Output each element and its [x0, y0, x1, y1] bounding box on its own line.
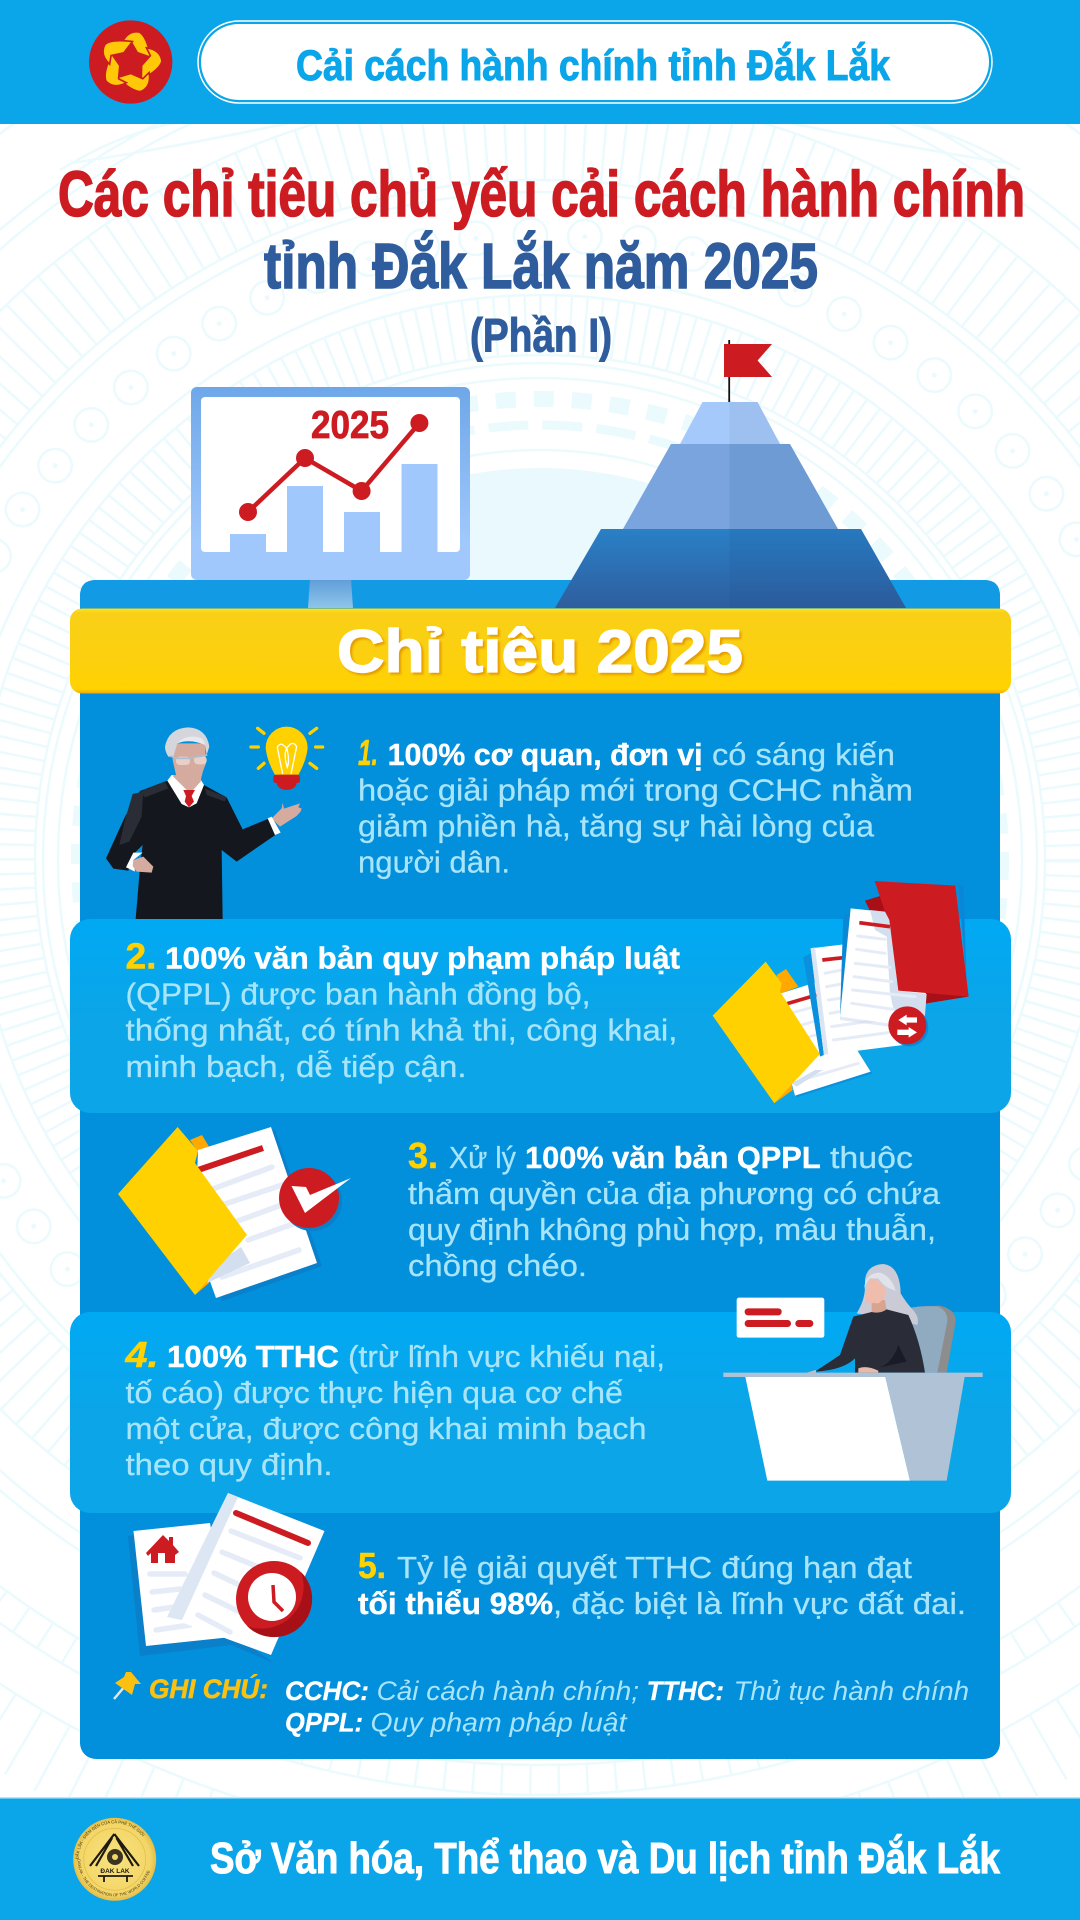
- note: ghi chú: Thủ tục hành chính: [734, 1676, 969, 1706]
- icon: folder with approved document: [118, 1127, 351, 1301]
- target 5 text: , đặc biệt là lĩnh vực đất đai.: [553, 1586, 966, 1621]
- info card: [737, 1298, 824, 1338]
- monitor chart illustration: 2025: [311, 404, 389, 447]
- target 5 text: tối thiểu 98%: [358, 1586, 553, 1621]
- logo: Dak Lak gold seal: ĐẮK LẮK - ĐIỂM ĐẾN CỦA CÀ PHÊ THẾ GIỚI: [75, 1820, 145, 1860]
- footer bar: [0, 1797, 1080, 1920]
- logo: Dak Lak gold seal: DAKLAK - THE DESTINATION OF THE WORLD COFFEE: [78, 1860, 150, 1896]
- title: (Phần I): [470, 308, 612, 362]
- target 3 text: 3.: [408, 1135, 438, 1176]
- target 4 text: 100% TTHC: [167, 1339, 339, 1374]
- icon: woman at reception desk: [723, 1264, 983, 1481]
- main blue panel: [80, 580, 1000, 1759]
- target 4 text: 4.: [124, 1334, 158, 1375]
- note: ghi chú: Quy phạm pháp luật: [370, 1708, 628, 1738]
- target 3 text: [408, 1135, 941, 1283]
- target 1 text: 100% cơ quan, đơn vị: [388, 737, 703, 772]
- header bar: [0, 0, 1080, 124]
- note: ghi chú: CCHC:: [285, 1676, 369, 1706]
- banner: Chỉ tiêu 2025: [70, 608, 1011, 694]
- target 4 text: tố cáo) được thực hiện qua cơ chế: [126, 1375, 623, 1410]
- icon: push pin: [114, 1672, 141, 1699]
- target 1 text: người dân.: [358, 844, 510, 880]
- target 5: [128, 1493, 966, 1663]
- target 4 text: [124, 1334, 665, 1482]
- title: tỉnh Đắk Lắk năm 2025: [264, 230, 818, 302]
- note: ghi chú: QPPL:: [285, 1708, 363, 1738]
- target 1 text: có sáng kiến: [712, 737, 895, 772]
- target 2 text: [126, 936, 680, 1084]
- target 4: [70, 1264, 1011, 1513]
- target 1 text: [358, 732, 913, 880]
- target 1: [106, 727, 913, 919]
- target 3: [118, 1127, 941, 1301]
- note: ghi chú: [114, 1672, 969, 1738]
- target 4 text: một cửa, được công khai minh bạch: [126, 1411, 646, 1446]
- target 2: [70, 881, 1011, 1113]
- target 1 text: 1.: [358, 732, 378, 773]
- target 5 text: 5.: [358, 1545, 386, 1586]
- target 2 text: 2.: [126, 936, 156, 976]
- mountain with flag: [555, 340, 906, 608]
- note: ghi chú: TTHC:: [647, 1676, 724, 1706]
- target 1 text: hoặc giải pháp mới trong CCHC nhằm: [358, 772, 913, 808]
- target 3 text: thẩm quyền của địa phương có chứa: [408, 1176, 941, 1211]
- target 2 text: thống nhất, có tính khả thi, công khai,: [126, 1012, 678, 1048]
- target 3 text: Xử lý: [449, 1140, 516, 1175]
- icon: man presenting: [106, 727, 323, 919]
- logo: red emblem with five hands: [89, 20, 172, 104]
- target 2 text: (QPPL) được ban hành đồng bộ,: [126, 976, 590, 1012]
- target 3 text: thuộc: [830, 1140, 913, 1175]
- note: ghi chú: GHI CHÚ:: [149, 1673, 268, 1704]
- target 3 text: quy định không phù hợp, mâu thuẫn,: [408, 1212, 936, 1247]
- monitor chart illustration: [191, 387, 470, 608]
- logo: Dak Lak gold seal: [73, 1818, 156, 1901]
- icon: light bulb: [251, 727, 323, 790]
- logo: Dak Lak gold seal: ĐAK LAK: [100, 1868, 130, 1875]
- target 3 text: chồng chéo.: [408, 1248, 587, 1283]
- icon: documents with house and clock: [128, 1493, 324, 1663]
- target 1 text: giảm phiền hà, tăng sự hài lòng của: [358, 808, 875, 844]
- target 2 text: minh bạch, dễ tiếp cận.: [126, 1049, 466, 1084]
- target 3 text: 100% văn bản QPPL: [525, 1140, 821, 1175]
- target 4 text: theo quy định.: [126, 1447, 332, 1482]
- title: [58, 158, 1025, 362]
- target 5 text: Tỷ lệ giải quyết TTHC đúng hạn đạt: [397, 1550, 912, 1585]
- banner: Chỉ tiêu 2025: Chỉ tiêu 2025: [337, 618, 743, 685]
- icon: documents and folders: [713, 881, 969, 1103]
- note: ghi chú: Cải cách hành chính;: [377, 1676, 639, 1706]
- target 5 text: [358, 1545, 966, 1621]
- target 4 text: (trừ lĩnh vực khiếu nại,: [348, 1339, 665, 1374]
- target 2 text: 100% văn bản quy phạm pháp luật: [165, 940, 680, 976]
- header pill: Cải cách hành chính tỉnh Đắk Lắk: [296, 41, 890, 90]
- header pill: [198, 21, 992, 103]
